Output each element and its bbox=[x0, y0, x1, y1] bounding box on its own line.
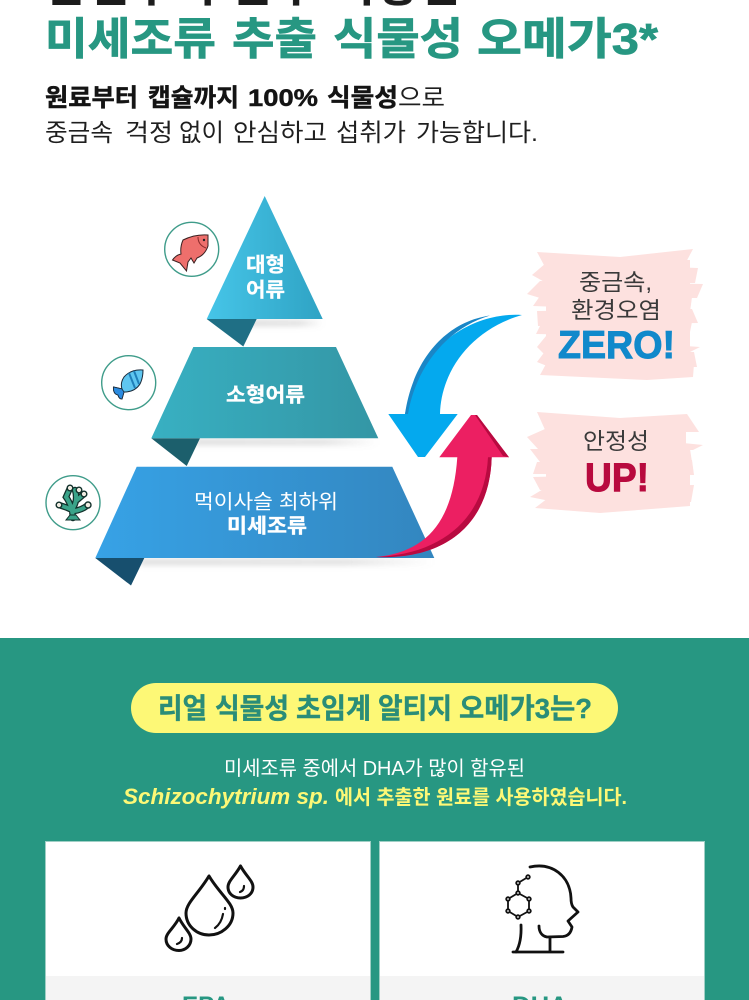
pyramid tier: microalgae: 먹이사슬 최하위 bbox=[194, 490, 338, 514]
icon: oil drops bbox=[166, 866, 253, 950]
pyramid tier: microalgae bbox=[95, 467, 434, 586]
text block: description bbox=[123, 757, 627, 809]
text block: intro bbox=[45, 84, 538, 147]
heading: microalgae omega-3: 식물성 bbox=[333, 15, 463, 64]
text block: intro: 섭취가 bbox=[336, 119, 406, 147]
pyramid tier: large fish: 어류 bbox=[246, 278, 285, 302]
badge: real plant-based omega-3 bbox=[131, 683, 618, 733]
pyramid tier: microalgae: 미세조류 bbox=[227, 514, 307, 538]
pyramid tier: large fish bbox=[207, 196, 323, 346]
text block: intro: 식물성 bbox=[327, 84, 398, 112]
heading: microalgae omega-3: 미세조류 bbox=[45, 15, 216, 64]
text block: intro: 없이 bbox=[179, 119, 224, 147]
badge: real plant-based omega-3: 오메가3는? bbox=[459, 693, 592, 724]
arrow: blue down arrow bbox=[388, 315, 522, 457]
text block: intro: 중금속 bbox=[45, 120, 113, 147]
text block: intro: 100% bbox=[248, 85, 318, 112]
pyramid tier: small fish: 소형어류 bbox=[226, 384, 305, 406]
icon: red fish bbox=[165, 222, 219, 276]
panel: green algae omega-3 section bbox=[0, 638, 749, 1000]
badge: real plant-based omega-3: 알티지 bbox=[378, 693, 452, 724]
chart: food chain pyramid bbox=[95, 196, 434, 586]
text block: intro: 걱정 bbox=[125, 119, 173, 147]
arrow: red up arrow bbox=[376, 415, 509, 557]
heading: microalgae omega-3 bbox=[45, 15, 659, 64]
heading: microalgae omega-3: 추출 bbox=[232, 15, 317, 64]
icon: seaweed bbox=[46, 476, 100, 530]
pyramid tier: large fish: 대형 bbox=[246, 254, 285, 276]
card: EPA bbox=[46, 842, 370, 1000]
badge: real plant-based omega-3: 식물성 bbox=[215, 693, 289, 724]
callout: heavy metals zero: 환경오염 bbox=[571, 297, 661, 323]
callout: heavy metals zero: ZERO! bbox=[558, 324, 675, 367]
icon: head with molecule bbox=[506, 866, 578, 952]
callout: stability up: UP! bbox=[585, 456, 649, 500]
card: DHA bbox=[380, 842, 704, 1000]
badge: real plant-based omega-3: 초임계 bbox=[296, 693, 371, 724]
callout: heavy metals zero bbox=[527, 249, 703, 380]
text block: intro: 가능합니다. bbox=[416, 119, 538, 147]
icon: blue fish bbox=[102, 356, 156, 410]
text block: intro: 으로 bbox=[398, 85, 445, 112]
text block: intro: 캡슐까지 bbox=[148, 84, 239, 112]
callout: heavy metals zero: 중금속, bbox=[579, 269, 652, 295]
heading: microalgae omega-3: 오메가3* bbox=[477, 15, 659, 64]
text block: intro: 안심하고 bbox=[233, 119, 327, 147]
text block: intro: 원료부터 bbox=[45, 84, 138, 112]
callout: stability up: 안정성 bbox=[583, 428, 649, 454]
badge: real plant-based omega-3: 리얼 bbox=[158, 693, 207, 724]
callout: stability up bbox=[527, 412, 703, 513]
text block: description: 에서 추출한 원료를 사용하였습니다. bbox=[335, 786, 627, 809]
pyramid tier: small fish bbox=[151, 347, 378, 466]
text block: description: Schizochytrium sp. bbox=[123, 784, 329, 809]
text block: description: 미세조류 중에서 DHA가 많이 함유된 bbox=[224, 757, 525, 780]
